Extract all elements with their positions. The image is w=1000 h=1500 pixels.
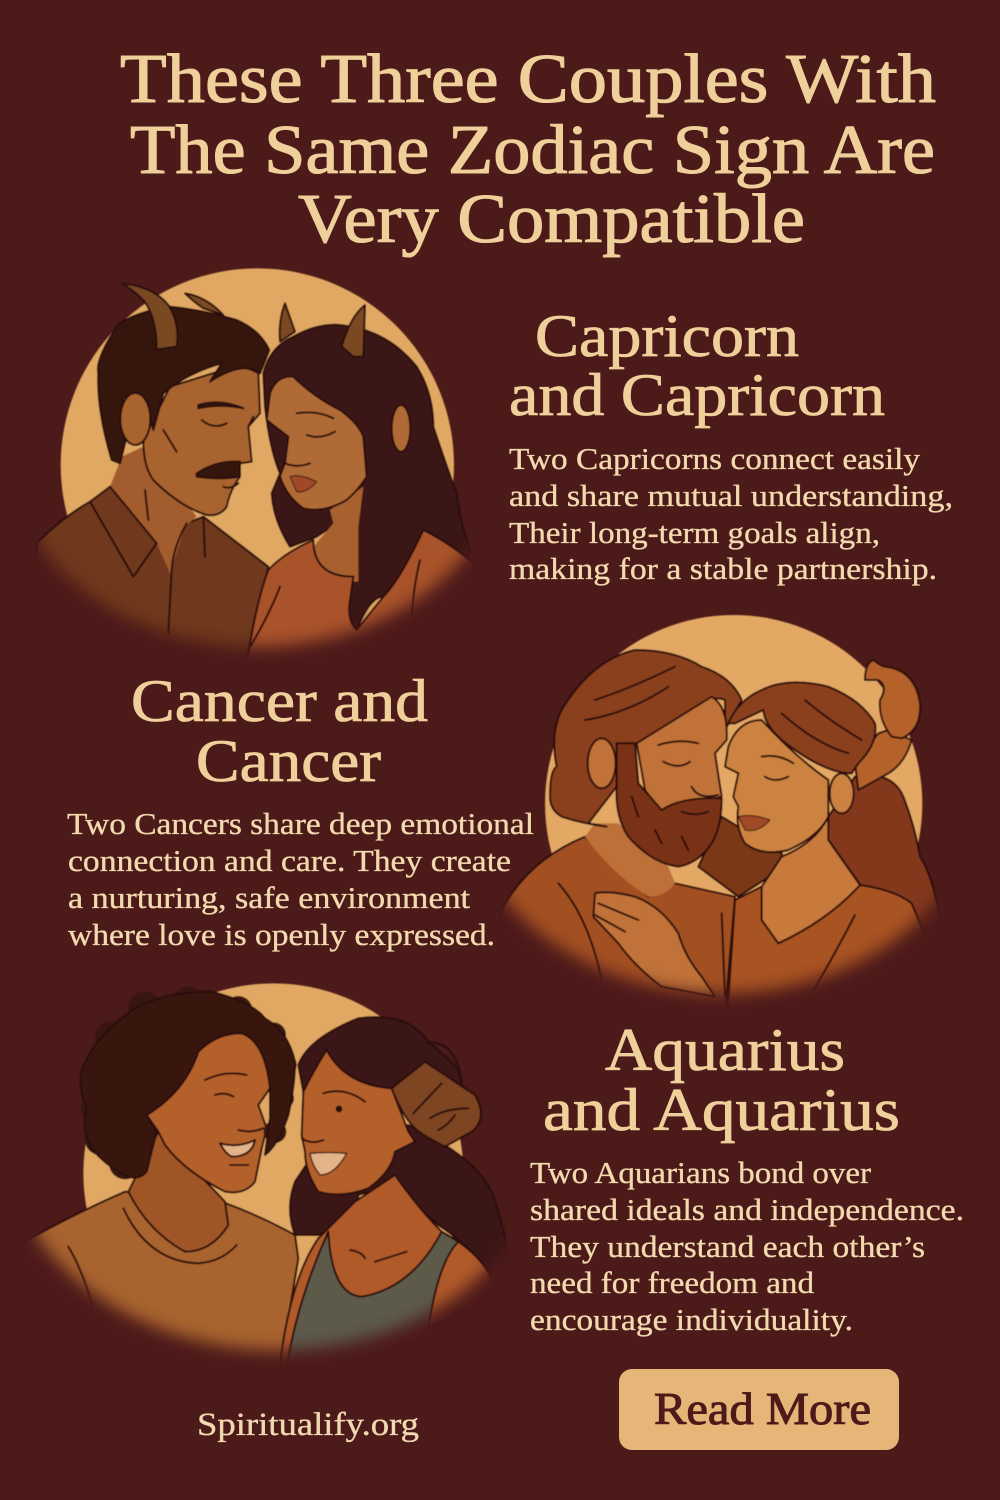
woman ear (392, 405, 410, 452)
text: Aquarius description: need for freedom and (530, 1265, 815, 1300)
woman face (725, 720, 828, 852)
title (120, 41, 936, 258)
text: Aquarius description: encourage individuality. (530, 1302, 853, 1337)
man ear (588, 738, 616, 788)
man shirt (502, 837, 735, 1013)
text: Aquarius description: Two Aquarians bond over (530, 1155, 872, 1190)
title: The Same Zodiac Sign Are (130, 112, 935, 189)
heading: Cancer and Cancer: Cancer (196, 728, 381, 794)
man neck (585, 823, 675, 897)
woman tank top (285, 1232, 458, 1378)
crab claw (865, 660, 920, 738)
heading: Cancer and Cancer: Cancer and (131, 668, 428, 734)
man shirt (30, 1190, 300, 1359)
text: Capricorn description: and share mutual understanding, (509, 478, 953, 513)
text: Capricorn description: making for a stable partnership. (509, 551, 937, 586)
crab arm (855, 730, 912, 790)
woman shirt (247, 530, 473, 663)
woman neck (762, 817, 860, 943)
illustration: Capricorn couple (37, 268, 473, 663)
heading: Aquarius and Aquarius (543, 1017, 900, 1143)
heading: Capricorn and Capricorn (509, 303, 885, 428)
text: Capricorn description: Two Capricorns connect easily (509, 441, 921, 476)
woman hair top (298, 1017, 462, 1132)
read more button: Read More (654, 1383, 871, 1434)
man neck (128, 1132, 228, 1252)
text: Capricorn description: Their long-term goals align, (509, 515, 880, 550)
woman features (762, 700, 862, 780)
woman shirt (727, 884, 922, 1003)
man horns (122, 283, 177, 349)
man neck (110, 447, 197, 573)
heading: Capricorn and Capricorn: and Capricorn (509, 362, 885, 428)
woman hair (263, 325, 470, 630)
woman horns (280, 303, 295, 342)
man hair (98, 307, 269, 463)
man hand (593, 892, 715, 997)
illustration: Cancer couple (502, 615, 942, 1013)
site name: Spiritualify.org (197, 1407, 419, 1443)
title: Very Compatible (298, 181, 805, 258)
text: Aquarius description (530, 1155, 964, 1337)
text: Cancer description (67, 806, 534, 952)
man face (637, 697, 727, 813)
man beard (616, 743, 722, 867)
woman hair behind (698, 817, 785, 897)
woman features (310, 1152, 347, 1175)
text: Cancer description: a nurturing, safe environment (68, 880, 470, 915)
man features (197, 461, 240, 478)
text: Capricorn description (509, 441, 953, 586)
read more button (619, 1369, 899, 1450)
heading: Cancer and Cancer (131, 668, 428, 794)
man ear (120, 393, 150, 445)
woman face (267, 377, 367, 510)
heading: Aquarius and Aquarius: and Aquarius (543, 1077, 900, 1143)
woman ear (830, 773, 854, 813)
man face (143, 367, 260, 515)
man face (147, 1033, 270, 1192)
man hair (550, 650, 742, 827)
text: Cancer description: where love is openly expressed. (68, 917, 495, 952)
woman face (302, 1050, 415, 1194)
woman chest (278, 1175, 497, 1378)
woman features (285, 412, 335, 466)
woman hair lower (290, 1125, 508, 1275)
text: Cancer description: connection and care. They create (68, 843, 511, 878)
man curly hair (81, 987, 297, 1179)
man shirt (37, 487, 268, 663)
man features (220, 1140, 255, 1157)
illustration: Aquarius couple (25, 983, 508, 1378)
text: Cancer description: Two Cancers share deep emotional (67, 806, 534, 841)
heading: Aquarius and Aquarius: Aquarius (605, 1017, 845, 1083)
woman neck (312, 487, 363, 582)
title: These Three Couples With (120, 41, 936, 118)
water jug (392, 1043, 481, 1147)
heading: Capricorn and Capricorn: Capricorn (535, 303, 799, 369)
text: Aquarius description: shared ideals and independence. (530, 1192, 964, 1227)
woman hair (728, 682, 875, 773)
man features (585, 667, 718, 850)
text: Aquarius description: They understand each other’s (530, 1229, 925, 1264)
